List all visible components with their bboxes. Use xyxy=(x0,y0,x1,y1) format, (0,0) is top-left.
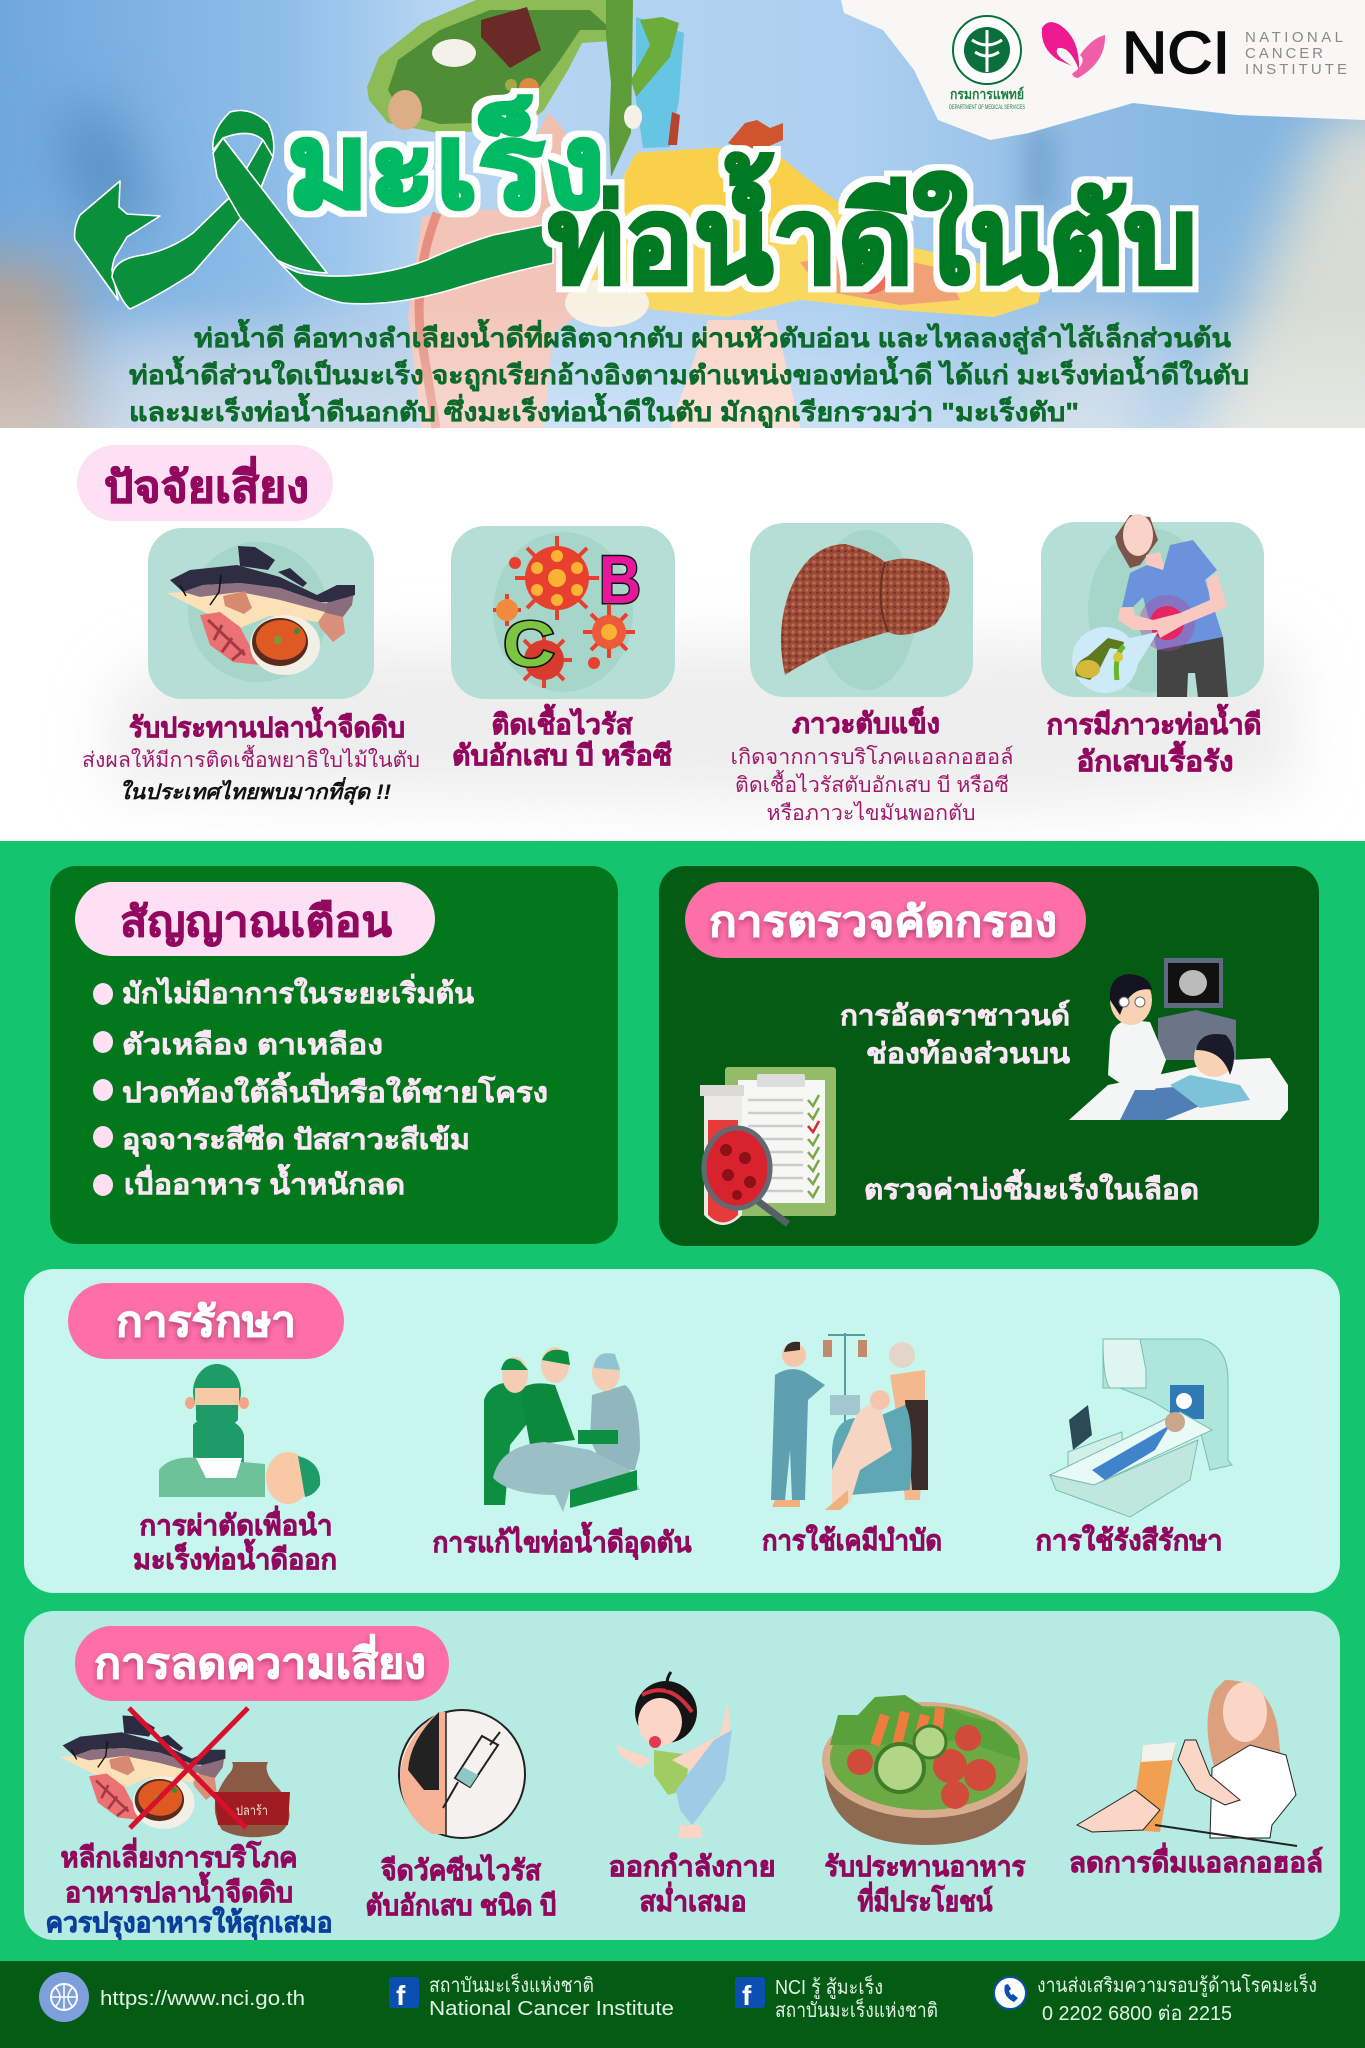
logo: NCI: NATIONAL xyxy=(1245,29,1343,46)
risk label: chronic inflammation: อักเสบเรื้อรัง xyxy=(1076,740,1234,777)
risk label: cirrhosis: ติดเชื้อไวรัสตับอักเสบ บี หรือซี xyxy=(735,770,1009,797)
green background xyxy=(0,841,1365,1961)
heading: treatment: การรักษา xyxy=(116,1298,296,1345)
icon: salad bowl xyxy=(822,1695,1028,1845)
treatment labels: มะเร็งท่อน้ำดีออก xyxy=(133,1538,337,1575)
torn paper corner xyxy=(841,0,1365,140)
icon: fish crossed out with fermented fish jar: ปลาร้า xyxy=(236,1803,268,1818)
icon: globe xyxy=(39,1972,89,2022)
hero background xyxy=(0,0,1365,490)
symptom list: ปวดท้องใต้ลิ้นปี่หรือใต้ชายโครง xyxy=(122,1071,548,1108)
intro text xyxy=(129,318,1249,429)
title: มะเร็ง xyxy=(287,95,605,233)
risk reduction labels: ตับอักเสบ ชนิด บี xyxy=(366,1890,556,1921)
risk label: cirrhosis xyxy=(730,706,1014,825)
screening label: ultrasound: การอัลตราซาวนด์ xyxy=(840,1000,1070,1031)
icon: fish crossed out with fermented fish jar xyxy=(60,1708,290,1837)
heading: risk factors: ปัจจัยเสี่ยง xyxy=(104,456,309,512)
panel: treatment xyxy=(24,1269,1340,1593)
phone contact: งานส่งเสริมความรอบรู้ด้านโรคมะเร็ง xyxy=(1037,1972,1317,1998)
icon: blood test clipboard xyxy=(700,1067,836,1225)
logo: NCI: NCI xyxy=(1122,20,1230,86)
screening label: ultrasound: ช่องท้องส่วนบน xyxy=(866,1038,1070,1069)
risk label: cirrhosis: ภาวะตับแข็ง xyxy=(792,706,940,739)
risk label: raw fish: ในประเทศไทยพบมากที่สุด !! xyxy=(119,777,391,805)
risk reduction labels: ลดการดื่มแอลกอฮอล์ xyxy=(1069,1842,1323,1878)
risk reduction labels: สม่ำเสมอ xyxy=(640,1881,746,1917)
phone contact xyxy=(1037,1972,1317,2025)
treatment labels: การแก้ไขท่อน้ำดีอุดตัน xyxy=(432,1521,692,1560)
heading: warning signs: สัญญาณเตือน xyxy=(120,898,392,947)
heading: screening: การตรวจคัดกรอง xyxy=(709,898,1057,945)
risk label: raw fish: รับประทานปลาน้ำจืดดิบ xyxy=(129,706,405,743)
risk reduction labels xyxy=(46,1837,1323,1940)
panel: warning signs xyxy=(50,866,618,1244)
title xyxy=(287,95,1197,308)
treatment labels xyxy=(133,1505,1222,1575)
screening label: ultrasound xyxy=(840,1000,1070,1069)
risk label: cirrhosis: หรือภาวะไขมันพอกตับ xyxy=(766,801,976,825)
icon: facebook xyxy=(389,1977,419,2011)
risk label: virus: ติดเชื้อไวรัส xyxy=(492,703,633,740)
icon: chemotherapy xyxy=(771,1333,928,1510)
risk reduction labels: รับประทานอาหาร xyxy=(824,1851,1026,1882)
logo: department of medical services: กรมการแพทย์ xyxy=(950,86,1024,102)
risk card: woman with chronic inflammation xyxy=(1041,514,1264,697)
risk reduction labels: ที่มีประโยชน์ xyxy=(858,1881,993,1917)
risk reduction labels: ออกกำลังกาย xyxy=(608,1851,776,1882)
logo: NCI xyxy=(1042,20,1347,86)
risk label: chronic inflammation: การมีภาวะท่อน้ำดี xyxy=(1046,703,1262,740)
panel: screening xyxy=(659,866,1319,1246)
icon: vaccine syringe xyxy=(399,1710,525,1838)
logo: NCI: CANCER xyxy=(1245,45,1323,62)
facebook NCI fights cancer xyxy=(775,1974,938,2022)
icon: exercising girl xyxy=(616,1672,732,1838)
icon: facebook: f xyxy=(742,1980,752,2011)
symptom list xyxy=(93,973,548,1200)
facebook NCI fights cancer: NCI รู้ สู้มะเร็ง xyxy=(775,1974,883,2000)
facebook NCI fights cancer: สถาบันมะเร็งแห่งชาติ xyxy=(775,1997,938,2022)
facebook NCI xyxy=(429,1972,674,2020)
icon: radiotherapy xyxy=(1050,1339,1232,1517)
symptom list: อุจจาระสีซีด ปัสสาวะสีเข้ม xyxy=(122,1124,470,1157)
risk label: virus: ตับอักเสบ บี หรือซี xyxy=(452,740,672,771)
footer xyxy=(0,1961,1365,2048)
organ illustration xyxy=(0,0,1365,428)
icon: facebook xyxy=(735,1977,765,2011)
treatment labels: การผ่าตัดเพื่อนำ xyxy=(140,1505,332,1541)
intro text: ท่อน้ำดี คือทางลำเลียงน้ำดีที่ผลิตจากตับ ผ่านหัวตับอ่อน และไหลลงสู่ลำไส้เล็กส่วนต้น xyxy=(194,318,1231,355)
risk card: hepatitis viruses: C xyxy=(503,608,555,680)
panel: risk reduction xyxy=(24,1611,1340,1940)
risk label: raw fish: ส่งผลให้มีการติดเชื้อพยาธิใบไม้ในตับ xyxy=(82,745,420,772)
risk label: cirrhosis: เกิดจากการบริโภคแอลกอฮอล์ xyxy=(730,745,1014,769)
facebook NCI: National Cancer Institute xyxy=(429,1998,674,2020)
risk label: virus xyxy=(452,703,672,771)
intro text: และมะเร็งท่อน้ำดีนอกตับ ซึ่งมะเร็งท่อน้ำดีในตับ มักถูกเรียกรวมว่า "มะเร็งตับ" xyxy=(129,392,1079,429)
intro text: ท่อน้ำดีส่วนใดเป็นมะเร็ง จะถูกเรียกอ้างอิงตามตำแหน่งของท่อน้ำดี ได้แก่ มะเร็งท่อน้ำดีในตับ xyxy=(129,355,1249,392)
icon: facebook: f xyxy=(396,1980,406,2011)
risk label: chronic inflammation xyxy=(1046,703,1262,777)
icon: refusing alcohol xyxy=(1077,1680,1297,1846)
phone contact: 0 2202 6800 ต่อ 2215 xyxy=(1042,2003,1232,2025)
risk reduction labels: อาหารปลาน้ำจืดดิบ xyxy=(65,1871,293,1908)
risk reduction labels: จีดวัคซีนไวรัส xyxy=(380,1854,542,1886)
risk card: raw fish xyxy=(148,528,374,699)
logo: department of medical services: DEPARTMENT OF MEDICAL SERVICES xyxy=(949,105,1025,111)
logo: department of medical services xyxy=(949,16,1025,111)
heading: risk reduction: การลดความเสี่ยง xyxy=(94,1634,426,1687)
logo: NCI: INSTITUTE xyxy=(1245,61,1347,78)
symptom list: มักไม่มีอาการในระยะเริ่มต้น xyxy=(122,973,474,1009)
treatment labels: การใช้รังสีรักษา xyxy=(1036,1524,1222,1556)
title: ท่อน้ำดีในตับ xyxy=(548,153,1197,308)
screening label: blood test: ตรวจค่าบ่งชี้มะเร็งในเลือด xyxy=(864,1168,1199,1205)
panel: risk factors xyxy=(0,428,1365,841)
icon: ultrasound scene xyxy=(1069,958,1288,1120)
risk label: raw fish xyxy=(82,706,420,805)
website: https://www.nci.go.th xyxy=(100,1988,305,2010)
icon: phone xyxy=(994,1977,1026,2009)
risk reduction labels: ควรปรุงอาหารให้สุกเสมอ xyxy=(46,1906,332,1940)
facebook NCI: สถาบันมะเร็งแห่งชาติ xyxy=(429,1972,594,1997)
symptom list: ตัวเหลือง ตาเหลือง xyxy=(122,1029,383,1060)
risk card: cirrhotic liver xyxy=(750,523,973,697)
icon: surgeon xyxy=(159,1364,320,1504)
risk card: hepatitis viruses: B xyxy=(599,542,641,618)
risk card: hepatitis viruses xyxy=(451,526,675,699)
icon: surgical team xyxy=(484,1347,640,1512)
symptom list: เบื่ออาหาร น้ำหนักลด xyxy=(124,1163,405,1200)
awareness ribbon xyxy=(75,110,553,309)
risk reduction labels: หลีกเลี่ยงการบริโภค xyxy=(60,1837,298,1873)
treatment labels: การใช้เคมีบำบัด xyxy=(762,1524,942,1556)
